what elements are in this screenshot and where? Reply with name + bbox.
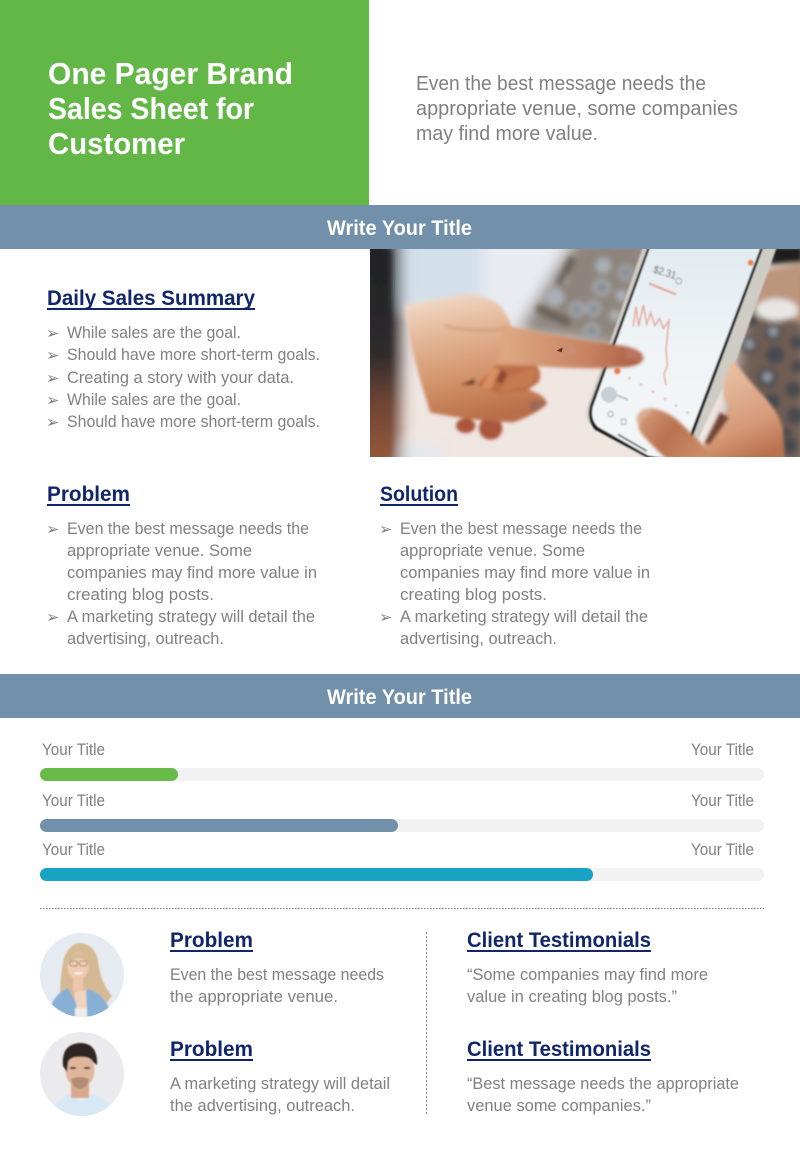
intro text: appropriate venue, some companies xyxy=(416,98,738,120)
text block: client testimonial 1: Client Testimonials xyxy=(467,929,651,952)
progress bar 2 xyxy=(40,792,764,832)
progress bars xyxy=(40,741,764,881)
bullet list: Creating a story with your data. xyxy=(67,369,294,387)
bullet list: ➢ xyxy=(46,324,59,342)
text block: problem 1: Problem xyxy=(170,929,253,952)
problem bullets xyxy=(46,520,317,648)
bullet list xyxy=(46,324,320,432)
bullet list: ➢ xyxy=(46,368,59,388)
panel: daily sales summary xyxy=(46,287,320,432)
progress bar 1: Your Title xyxy=(42,741,105,759)
title xyxy=(48,56,293,161)
progress bar 1: Your Title xyxy=(691,741,754,759)
problem bullets: Even the best message needs the xyxy=(67,520,309,538)
text block: client testimonial 2: Client Testimonials xyxy=(467,1038,651,1061)
problem bullets: creating blog posts. xyxy=(67,586,214,604)
title: Customer xyxy=(48,126,185,161)
problem bullets: advertising, outreach. xyxy=(67,630,224,648)
phone xyxy=(586,246,777,459)
intro text: Even the best message needs the xyxy=(416,73,706,95)
text block: problem 2: Problem xyxy=(170,1038,253,1061)
bullet list: ➢ xyxy=(46,346,59,364)
left hand xyxy=(405,294,547,422)
bullet list: Should have more short-term goals. xyxy=(67,413,320,431)
text block: problem 2: A marketing strategy will detail xyxy=(170,1075,390,1093)
heading: solution: Solution xyxy=(380,483,458,506)
text block: problem 2: the advertising, outreach. xyxy=(170,1097,355,1115)
problem bullets: appropriate venue. Some xyxy=(67,542,252,560)
solution bullets: A marketing strategy will detail the xyxy=(400,608,648,626)
intro text: may find more value. xyxy=(416,123,598,145)
left hand fingertips xyxy=(456,418,475,433)
section banner 2 xyxy=(0,674,800,718)
section banner 2: Write Your Title xyxy=(327,686,472,709)
progress bar 3 xyxy=(40,841,764,881)
solution bullets: ➢ xyxy=(379,608,392,626)
text block: problem 2 xyxy=(170,1038,390,1115)
text block: client testimonial 1: value in creating blog posts.” xyxy=(467,988,677,1006)
progress bar 2: Your Title xyxy=(691,792,754,810)
heading: daily sales summary: Daily Sales Summary xyxy=(47,287,255,310)
solution bullets xyxy=(379,520,650,648)
solution bullets: appropriate venue. Some xyxy=(400,542,585,560)
solution bullets: advertising, outreach. xyxy=(400,630,557,648)
right hand fingers xyxy=(705,361,785,459)
text block: client testimonial 1 xyxy=(467,929,708,1006)
text block: problem 1: Even the best message needs xyxy=(170,966,384,984)
solution bullets: creating blog posts. xyxy=(400,586,547,604)
right hand thumb xyxy=(637,408,712,459)
solution bullets: Even the best message needs the xyxy=(400,520,642,538)
avatar: woman xyxy=(40,933,124,1017)
title: Sales Sheet for xyxy=(48,91,254,126)
progress bar 3: Your Title xyxy=(691,841,754,859)
section banner 1 xyxy=(0,205,800,249)
text block: problem 1 xyxy=(170,929,384,1006)
progress bar 2: Your Title xyxy=(42,792,105,810)
avatar: man xyxy=(40,1032,124,1116)
header panel xyxy=(0,0,369,205)
text block: client testimonial 1: “Some companies may find more xyxy=(467,966,708,984)
photo: hands using a phone with a chart xyxy=(370,249,800,457)
solution bullets: companies may find more value in xyxy=(400,564,650,582)
title: One Pager Brand xyxy=(48,56,293,91)
bullet list: ➢ xyxy=(46,412,59,432)
panel: solution xyxy=(379,483,650,648)
bullet list: ➢ xyxy=(46,390,59,410)
problem bullets: companies may find more value in xyxy=(67,564,317,582)
problem bullets: ➢ xyxy=(46,520,59,538)
progress bar 1 xyxy=(40,741,764,781)
problem bullets: ➢ xyxy=(46,608,59,626)
bullet list: While sales are the goal. xyxy=(67,391,241,409)
bullet list: While sales are the goal. xyxy=(67,324,241,342)
photo: hands using a phone with a chart: $2.31 xyxy=(652,264,678,282)
section banner 1: Write Your Title xyxy=(327,217,472,240)
text block: client testimonial 2 xyxy=(467,1038,739,1115)
text block: client testimonial 2: “Best message needs the appropriate xyxy=(467,1075,739,1093)
text block: problem 1: the appropriate venue. xyxy=(170,988,338,1006)
heading: problem: Problem xyxy=(47,483,130,506)
panel: problem xyxy=(46,483,317,648)
bullet list: Should have more short-term goals. xyxy=(67,346,320,364)
progress bar 3: Your Title xyxy=(42,841,105,859)
intro text xyxy=(416,73,738,145)
problem bullets: A marketing strategy will detail the xyxy=(67,608,315,626)
solution bullets: ➢ xyxy=(379,520,392,538)
text block: client testimonial 2: venue some companies.” xyxy=(467,1097,651,1115)
